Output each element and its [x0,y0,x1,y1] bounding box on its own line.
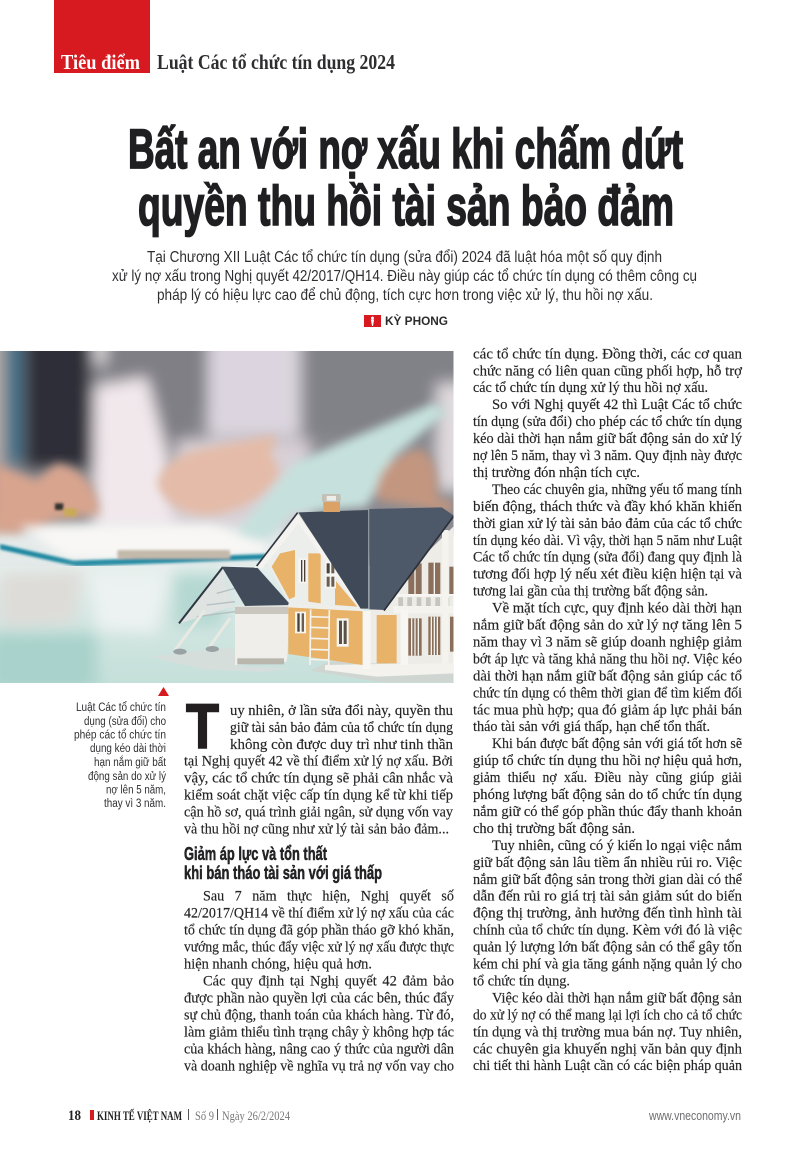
drop cap T: T [186,692,219,762]
left column: opening paragraph: giữ tài sản bảo đảm của tổ chức tín dụng [230,720,453,736]
footer: page number and publication: 18 [68,1108,81,1124]
left column: body paragraphs [184,889,455,1075]
main roof [298,510,368,609]
house model [150,494,455,683]
intro text: xử lý nợ xấu trong Nghị quyết 42/2017/QH14. Điều này giúp các tổ chức tín dụng có thêm công cụ [112,268,697,285]
right column: body paragraphs: tương đối hợp lý nếu xét điều kiện hiện tại và [473,567,743,583]
left column: opening paragraph: uy nhiên, ở lần sửa đổi này, quyền thu [230,703,453,719]
right column: body paragraphs: nắm giữ bất động sản trong thời gian dài có thể [473,872,743,888]
right column: body paragraphs: dẫn đến rủi ro giá trị tài sản giảm sút do biến [473,889,742,905]
right column: body paragraphs: Khi bán được bất động sản với giá tốt hơn sẽ [492,736,742,752]
left column: body paragraphs: vướng mắc, thúc đẩy việc xử lý nợ xấu được thực [184,940,454,956]
right column: body paragraphs: kéo dài thời hạn nắm giữ bất động sản do xử lý [473,431,743,447]
left column: opening paragraph: cận hồ sơ, quá trình giải ngân, sử dụng vốn vay [184,804,454,820]
windows [295,558,349,647]
blurred background of people and documents [0,351,454,566]
right column: body paragraphs: Theo các chuyên gia, những yếu tố mang tính [492,482,742,498]
right column: body paragraphs: Các tổ chức tín dụng (sửa đổi) đang quy định là [473,550,743,566]
right column: body paragraphs: giúp tổ chức tín dụng thu hồi nợ hiệu quả hơn, [473,753,742,769]
left column: body paragraphs: Các quy định tại Nghị quyết 42 đảm bảo [203,974,454,990]
left column: opening paragraph: tại Nghị quyết 42 về thí điểm xử lý nợ xấu. Bởi [184,754,453,770]
ladder [310,609,329,666]
photo caption: dụng kéo dài thời [90,743,166,755]
left column: opening paragraph: kiểm soát chặt việc cấp tín dụng kể từ khi tiếp [184,788,453,804]
left column: opening paragraph [184,703,454,837]
photo caption: phép các tổ chức tín [74,730,166,742]
photo caption: hạn nắm giữ bất [94,756,167,769]
section subject: Luật Các tổ chức tín dụng 2024: Luật Các tổ chức tín dụng 2024 [157,50,395,74]
footer: page number and publication: Ngày 26/2/2024 [222,1108,290,1123]
right column: body paragraphs: quản lý lượng lớn bất động sản có thể gây tốn [473,940,742,956]
caption pointer triangle [158,687,169,696]
photo caption: dụng (sửa đổi) cho [84,716,166,728]
byline: Kỳ Phong: KỲ PHONG [385,313,448,328]
right column: body paragraphs: thời gian xử lý tài sản bảo đảm của các tổ chức [473,516,742,532]
footer: website: www.vneconomy.vn [648,1109,741,1123]
footer: page number and publication: KINH TẾ VIỆT NAM [97,1108,182,1123]
photo: house model and documents on a table [0,351,454,683]
right column: body paragraphs: thị trường đón nhận tích cực. [473,465,640,481]
right column: body paragraphs: kém chi phí và gia tăng gánh nặng quản lý cho [473,956,742,972]
right column: body paragraphs: chức năng có liên quan cũng phối hợp, hỗ trợ [473,363,742,379]
footer: page number and publication [68,1108,290,1124]
intro text: Tại Chương XII Luật Các tổ chức tín dụng (sửa đổi) 2024 đã luật hóa một số quy định [147,249,662,266]
right column: body paragraphs: chi tiết thi hành Luật cần có các biện pháp quản [473,1058,742,1074]
right column: body paragraphs: Việc kéo dài thời hạn nắm giữ bất động sản [492,990,742,1006]
chimney [323,501,340,512]
left column: body paragraphs: được phần nào quyền lợi của các bên, thúc đẩy [184,991,455,1007]
right column: body paragraphs: biến động, thách thức và đầy khó khăn khiến [473,499,742,515]
byline: Kỳ Phong [364,313,448,328]
left column: body paragraphs: và doanh nghiệp về nghĩa vụ trả nợ vốn vay cho [184,1059,454,1075]
right column: body paragraphs: do xử lý nợ có thể mang lại lợi ích cho cả tổ chức [473,1007,742,1023]
photo caption: động sản do xử lý [88,771,166,783]
title [128,117,683,237]
left column: body paragraphs: làm giảm thiểu tình trạng chây ỳ không hợp tác [184,1025,454,1041]
right column: body paragraphs: động thị trường, ảnh hưởng đến tình hình tài [473,906,742,922]
right column: body paragraphs: nắm giữ bất động sản do xử lý nợ tăng lên 5 [473,618,742,634]
right column: body paragraphs: chính của tổ chức tín dụng. Kèm với đó là việc [473,923,742,939]
right column: body paragraphs: các tổ chức tín dụng. Đồng thời, các cơ quan [473,346,742,362]
photo caption: thay vì 3 năm. [104,798,166,810]
section tag: Tiêu điểm: Tiêu điểm [61,50,140,74]
right column: body paragraphs [473,346,743,1074]
section tag: Tiêu điểm [54,0,150,74]
right column: body paragraphs: tổ chức tín dụng. [473,974,570,990]
right column: body paragraphs: Tuy nhiên, cũng có ý kiến lo ngại việc nắm [492,838,742,854]
left column: body paragraphs: tổ chức tín dụng đã góp phần tháo gỡ khó khăn, [184,923,454,939]
right column: body paragraphs: So với Nghị quyết 42 thì Luật Các tổ chức [492,397,742,413]
subheading [184,844,382,883]
right column: body paragraphs: giữ bất động sản lâu tiềm ẩn nhiều rủi ro. Việc [473,855,742,871]
right column: body paragraphs: chức tín dụng có thêm thời gian để tìm kiếm đối [473,685,742,701]
subheading: khi bán tháo tài sản với giá thấp [184,863,382,883]
main wall [288,605,363,665]
left column: body paragraphs: của khách hàng, nâng cao ý thức của người dân [184,1042,454,1058]
left column: body paragraphs: 42/2017/QH14 về thí điểm xử lý nợ xấu của các [184,906,454,922]
right column: body paragraphs: tương lai gần của thị trường bất động sản. [473,584,708,600]
right column: body paragraphs: tháo tài sản với giá thấp, hạn chế tổn thất. [473,719,710,735]
right wing [368,527,455,663]
right column: body paragraphs: tác mua phù hợp; qua đó giảm áp lực phải bán [473,702,742,718]
left column: opening paragraph: và thu hồi nợ cũng như xử lý tài sản bảo đảm... [184,821,449,837]
left column: body paragraphs: Sau 7 năm thực hiện, Nghị quyết số [203,889,454,905]
right column: body paragraphs: nợ lên 5 năm, thay vì 3 năm. Quy định này được [473,448,742,464]
right column: body paragraphs: giảm thiểu nợ xấu. Điều này cũng giúp giải [473,770,742,786]
right column: body paragraphs: bớt áp lực và tăng khả năng thu hồi nợ. Việc kéo [473,651,742,667]
left column: body paragraphs: sự chủ động, thanh toán của khách hàng. Từ đó, [184,1008,454,1024]
photo caption [74,702,167,810]
right column: body paragraphs: năm thay vì 3 năm sẽ giúp doanh nghiệp giảm [473,634,742,650]
right column: body paragraphs: phóng lượng bất động sản do tổ chức tín dụng [473,787,742,803]
right column: body paragraphs: tín dụng kéo dài. Vì vậy, thời hạn 5 năm như Luật [473,533,742,549]
right column: body paragraphs: nắm giữ có thể góp phần thúc đẩy thanh khoản [473,804,742,820]
subheading: Giảm áp lực và tổn thất [184,844,327,864]
left column: opening paragraph: không còn được duy trì như tinh thần [230,737,453,753]
annex [180,569,233,623]
intro text [112,249,697,304]
right column: body paragraphs: các chuyên gia khuyến nghị văn bản quy định [473,1041,742,1057]
right column: body paragraphs: dài thời hạn nắm giữ bất động sản giúp các tổ [473,668,742,684]
right column: body paragraphs: tín dụng (sửa đổi) cho phép các tổ chức tín dụng [473,414,742,430]
footer: page number and publication: Số 9 [195,1108,214,1123]
photo caption: nợ lên 5 năm, [106,784,166,796]
right column: body paragraphs: tín dụng và thị trường mua bán nợ. Tuy nhiên, [473,1024,742,1040]
right column: body paragraphs: Về mặt tích cực, quy định kéo dài thời hạn [492,601,742,617]
intro text: pháp lý có hiệu lực cao để chủ động, tích cực hơn trong việc xử lý, thu hồi nợ xấu. [157,287,653,304]
right column: body paragraphs: các tổ chức tín dụng xử lý thu hồi nợ xấu. [473,380,708,396]
left column: body paragraphs: hiện nhanh chóng, hiệu quả hơn. [184,957,372,973]
photo caption: Luật Các tổ chức tín [76,702,166,714]
right column: body paragraphs: cho thị trường bất động sản. [473,821,635,837]
left column: opening paragraph: vậy, các tổ chức tín dụng sẽ phải cân nhắc và [184,771,454,787]
